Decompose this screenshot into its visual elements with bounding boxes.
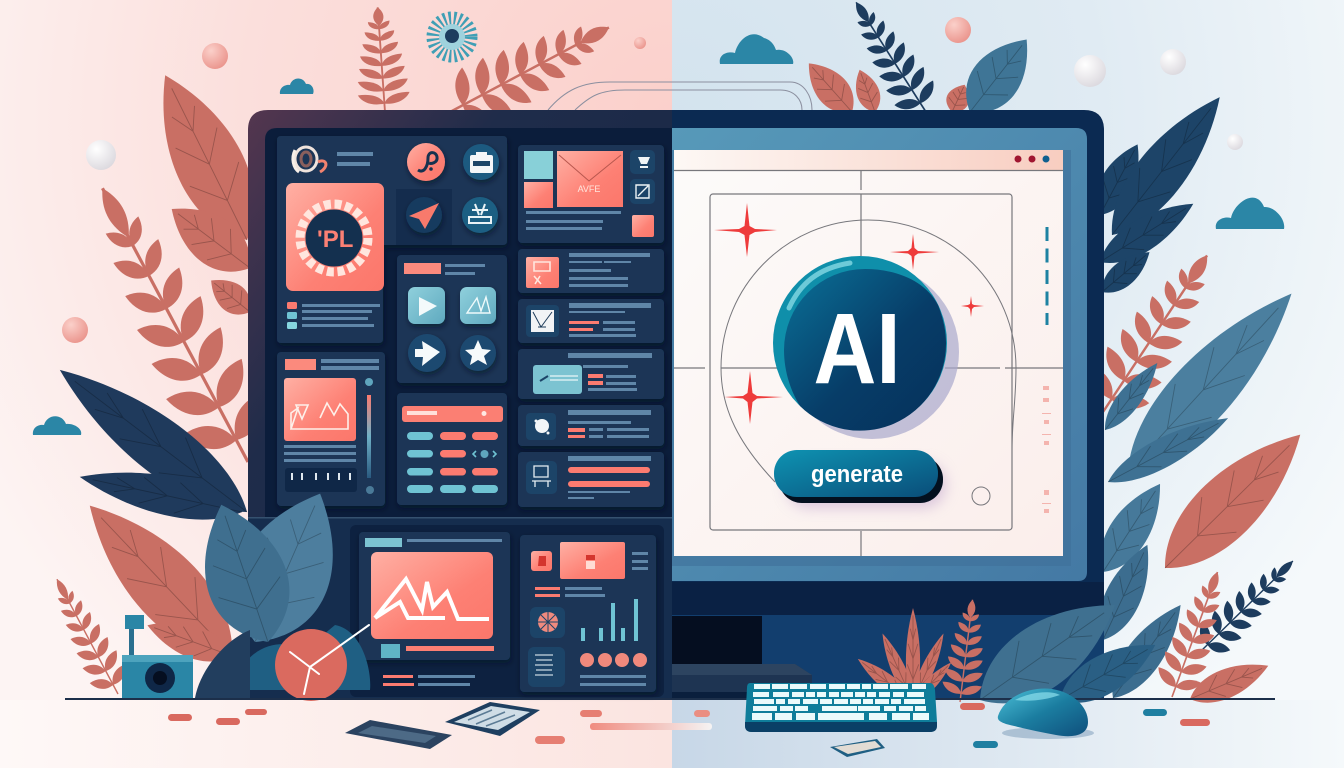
sparkle: small: [961, 296, 984, 317]
icon: QR tile: [526, 257, 559, 288]
title bar: [674, 150, 1063, 170]
card background: [397, 393, 507, 505]
lens glass: [153, 671, 167, 685]
generate button: [774, 450, 946, 508]
screen shadow: [672, 150, 1071, 566]
salmon square: [524, 182, 553, 208]
ring of dashes: [300, 204, 368, 272]
background: cool right half: [672, 0, 1344, 700]
icon: splash button: [526, 413, 556, 440]
leaf: teal: [1096, 356, 1166, 437]
mouse body: [998, 689, 1088, 736]
faint side marks: [1042, 386, 1051, 513]
clock face: [275, 629, 347, 701]
AI label: AI: [814, 293, 900, 405]
decoration: top-right plants: [720, 0, 1284, 229]
clock hands: [290, 625, 369, 694]
leaf: teal narrow: [1101, 405, 1235, 495]
icon: monitor button: [630, 150, 655, 174]
monitor shell right: [672, 110, 1104, 615]
camera body: [122, 655, 193, 700]
button shadow: [786, 462, 946, 508]
pen on desk: [590, 723, 712, 730]
panel: email card: [518, 145, 664, 243]
text lines: [569, 303, 651, 337]
leaf: navy: [1094, 243, 1157, 301]
camera stalk: [129, 628, 134, 656]
desk surface: right: [672, 700, 1344, 768]
base shadow: [672, 692, 762, 700]
small circle control: [972, 487, 990, 505]
leaf: navy lower: [76, 458, 246, 531]
salmon progress bar: [406, 646, 494, 651]
panel: dashboard card: [520, 535, 656, 692]
icon: teal sunburst: [434, 19, 470, 55]
icon: swirl logo: [293, 147, 326, 172]
text lines: [580, 675, 646, 686]
pill: [1180, 719, 1210, 726]
camera: [122, 615, 193, 700]
card background: [520, 535, 656, 692]
icon: salmon logo button: [407, 143, 445, 181]
card background: [397, 255, 507, 383]
sparkle: top right: [890, 234, 939, 270]
camera band: [122, 655, 193, 662]
leaf: salmon: [942, 80, 975, 117]
plant: salmon small fern: [1148, 563, 1242, 706]
leaf: salmon: [797, 53, 864, 123]
wide salmon tile: [560, 542, 625, 579]
monitor shell left: [248, 110, 672, 698]
card background: [518, 299, 664, 343]
badge shadow: [785, 265, 959, 439]
mini bar chart: [581, 599, 638, 641]
leaf: salmon: [849, 66, 886, 116]
envelope tile: AVFE: [578, 184, 600, 194]
panel: list row one: [518, 249, 664, 293]
leaf: navy large: [1093, 82, 1239, 250]
leaf: dark stem: [195, 630, 250, 698]
button base: [779, 456, 943, 503]
text lines: [569, 253, 650, 287]
decorative ball: [634, 37, 646, 49]
text lines: [526, 211, 621, 230]
monitor stand area: [672, 615, 1104, 700]
dark interior: [265, 128, 672, 698]
black panel: [672, 616, 762, 664]
leaf base behind clock: [240, 625, 370, 690]
leaf: navy upper: [43, 348, 264, 534]
teal square: [524, 151, 553, 179]
text lines: [337, 152, 373, 166]
plant: upright fern: [348, 5, 414, 114]
inner bezel: [672, 128, 1087, 581]
card background: [518, 349, 664, 399]
icon: chart button: [630, 179, 655, 204]
card background: [518, 452, 664, 507]
panel: big chart card: [359, 532, 510, 660]
salmon dots: [580, 653, 647, 667]
badge rim: [773, 256, 947, 430]
panel: list row three: [518, 349, 664, 399]
card background: [518, 249, 664, 293]
icon: document button: [528, 647, 565, 687]
chin shading: [672, 582, 1104, 615]
navy disc: [306, 210, 362, 266]
background: warm left half: [0, 0, 672, 700]
icon: desk button: [526, 461, 557, 494]
PL label: 'PL: [317, 226, 353, 253]
sparkle: top left: [714, 203, 777, 257]
button label: generate: [811, 461, 903, 488]
decorative ball: [1160, 49, 1186, 75]
leaf: small salmon: [202, 269, 259, 323]
plant: salmon sprout by keyboard: [853, 608, 955, 708]
text lines: [321, 359, 379, 370]
text lines: [535, 587, 605, 597]
lens: [145, 663, 175, 693]
small card: [830, 739, 885, 757]
leaf: salmon base: [1184, 652, 1274, 712]
icon: cloud: [1216, 198, 1284, 229]
panel: chart card: [277, 352, 385, 506]
stand base shelf: [672, 664, 812, 692]
button face: [774, 450, 938, 497]
desk surface: left: [0, 700, 672, 768]
mouse highlight: [1015, 692, 1060, 701]
pill: [973, 741, 998, 748]
salmon bars: [568, 467, 650, 487]
keyboard: [745, 683, 937, 732]
mouse shadow: [1002, 727, 1094, 739]
icon: printer button: [463, 144, 499, 180]
screen: [674, 150, 1063, 556]
pill: [960, 703, 985, 710]
pills: [407, 432, 498, 493]
leaf: teal lower: [1087, 473, 1176, 583]
icon: cloud: [720, 34, 793, 64]
panel: pill table card: [397, 393, 507, 505]
decorative ball: [62, 317, 88, 343]
small salmon icon tile: [531, 551, 552, 571]
salmon badge: [632, 215, 654, 237]
desk items: right: [694, 703, 1210, 757]
plant: navy small fern: [1184, 545, 1309, 668]
card background: [518, 405, 664, 446]
leaf: navy behind mouse: [1050, 628, 1165, 717]
vertical slider: [365, 378, 374, 494]
teal message tile: [533, 365, 582, 394]
icon: play tile: [408, 287, 445, 324]
decoration: right foliage: [1071, 82, 1322, 712]
leaf: navy: [1091, 190, 1202, 276]
text lines: [568, 410, 651, 438]
pill: [216, 718, 240, 725]
decorative ball: [1227, 134, 1243, 150]
side dashes: [1046, 227, 1048, 325]
plant: salmon fern by keyboard: [938, 597, 995, 705]
camera top: [125, 615, 144, 629]
desk items: left: [168, 702, 712, 749]
leaf: teal large: [1105, 273, 1314, 493]
mountain line chart: [375, 579, 489, 619]
salmon lines: [569, 321, 599, 331]
decoration: top-left plants: [33, 0, 646, 435]
leaf: middle salmon: [157, 190, 265, 287]
legend text lines: [302, 304, 380, 327]
desk line: [65, 698, 1275, 700]
badge face: [784, 269, 946, 431]
plant: angled fern: [432, 0, 627, 146]
stand background: [672, 615, 1104, 700]
card background: [277, 352, 385, 506]
panel: media controls card: [397, 255, 507, 383]
salmon tag: [404, 263, 441, 274]
monitor: left dark half: [248, 110, 672, 698]
text lines: [445, 264, 485, 275]
leaf: teal lower: [1099, 595, 1195, 708]
monitor: right half: [672, 110, 1104, 615]
keyboard front: [745, 722, 937, 732]
text line: [568, 456, 651, 461]
clock: [275, 625, 369, 701]
legend squares: [287, 302, 297, 329]
leaf: left: [183, 492, 306, 655]
badge highlight: [789, 263, 850, 308]
leaf: navy: [1086, 137, 1152, 223]
pill: [168, 714, 192, 721]
icon: tool button: [462, 197, 498, 233]
mountain chart tile: [284, 378, 356, 441]
inset dark tile: [396, 189, 452, 245]
leaf: salmon lower: [65, 482, 257, 679]
leaf: right: [214, 476, 361, 660]
icon: cloud: [33, 416, 81, 435]
icon: star button: [460, 335, 496, 371]
pill: [694, 710, 710, 717]
panel: list row four: [518, 405, 664, 446]
decorative ball: [202, 43, 228, 69]
leaf: front teal: [961, 579, 1134, 726]
connector lines above monitor: [548, 82, 812, 110]
decoration: left foliage: [37, 60, 292, 705]
panel: main app card: [277, 136, 507, 343]
card background: [277, 136, 507, 343]
leaf: salmon large: [1143, 413, 1322, 590]
leaf: salmon base: [142, 610, 238, 671]
key rows: [752, 684, 929, 720]
salmon lines: [588, 374, 603, 385]
salmon tag: [285, 359, 316, 370]
leaf: large salmon: [135, 60, 277, 255]
salmon header bar: [402, 406, 503, 422]
tick strip: [285, 468, 357, 492]
icon: mail tile: [526, 305, 559, 337]
icon: cloud: [280, 78, 314, 94]
text lines: [568, 353, 652, 391]
card background: [518, 145, 664, 243]
plant: salmon fern: [1071, 234, 1239, 433]
small teal tile: [381, 644, 400, 658]
icon: paper plane button: [406, 197, 442, 233]
phone on desk: [345, 720, 452, 749]
teal leaves in front of left panel: [183, 476, 370, 698]
keyboard body: [745, 683, 937, 732]
salmon chart tile: [371, 552, 493, 639]
decorative ball: [86, 140, 116, 170]
side lines: [632, 552, 648, 570]
AI badge: [773, 256, 959, 439]
mouse: [998, 689, 1094, 739]
pill: [1143, 709, 1167, 716]
shelf top: [672, 664, 812, 675]
icon: flower button: [530, 607, 565, 638]
window dots: [1014, 156, 1022, 162]
icon: mountain tile: [460, 287, 496, 324]
decorative ball: [945, 17, 971, 43]
text lines: [284, 445, 356, 462]
text lines: [568, 491, 630, 499]
text line: [407, 539, 502, 542]
leaf: teal: [951, 25, 1046, 127]
pill: [535, 736, 565, 744]
envelope tile: [557, 151, 623, 207]
decorative ball: [1074, 55, 1106, 87]
plant: navy fern: [834, 0, 948, 126]
plant: small bottom fern: [37, 569, 138, 705]
text lines under chart card: [383, 675, 475, 686]
pill: [580, 710, 602, 717]
card background: [359, 532, 510, 660]
pill: [245, 709, 267, 715]
panel: list row two: [518, 299, 664, 343]
editor frame and guides: [674, 170, 1063, 556]
lower panel base: [248, 517, 672, 698]
icon: arrow button: [408, 334, 446, 372]
tile: PL logo: [286, 183, 384, 291]
teal tag: [365, 538, 402, 547]
sparkle: lower left: [724, 371, 783, 424]
card on desk: [445, 702, 540, 736]
leaf: teal lower: [1087, 537, 1163, 647]
panel: list row five: [518, 452, 664, 507]
plant: tall salmon fern: [58, 165, 292, 485]
salmon lines: [568, 428, 585, 438]
